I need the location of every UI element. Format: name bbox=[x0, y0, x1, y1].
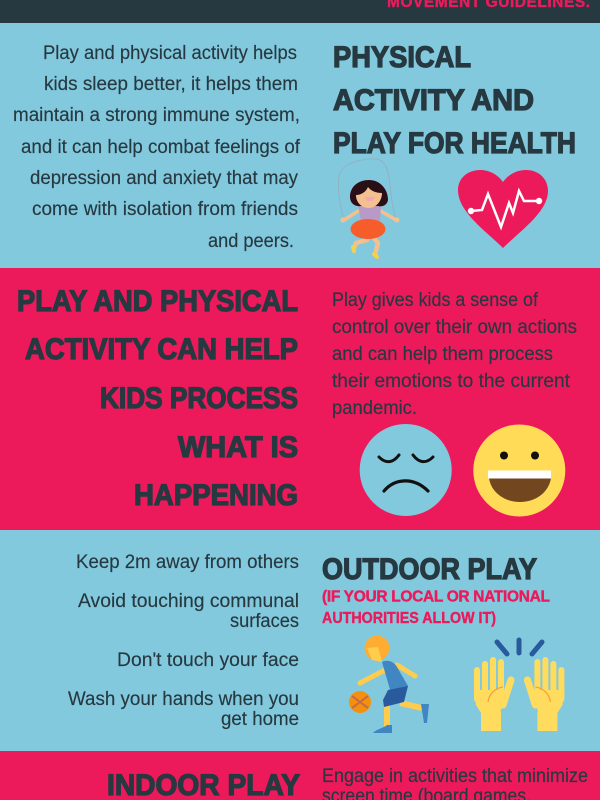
panel: indoor play bbox=[0, 751, 600, 800]
text block: health benefits: maintain a strong immune system, bbox=[13, 105, 300, 126]
text block: health benefits: kids sleep better, it helps them bbox=[44, 74, 298, 95]
text block: health benefits: depression and anxiety that may bbox=[30, 168, 298, 189]
text block: outdoor safety rules: Don't touch your face bbox=[117, 650, 299, 671]
text block: outdoor safety rules: Keep 2m away from others bbox=[76, 552, 299, 573]
text block: outdoor safety rules: surfaces bbox=[230, 611, 299, 632]
icon: child dribbling basketball bbox=[349, 636, 429, 733]
text block: health benefits: come with isolation from friends bbox=[32, 199, 298, 220]
icon: raised hands bbox=[474, 640, 564, 731]
heading: play and physical activity can help kids process: KIDS PROCESS bbox=[100, 382, 298, 415]
subheading: authorities note: (IF YOUR LOCAL OR NATIONAL bbox=[322, 588, 550, 606]
text block: indoor activities: Engage in activities that minimize bbox=[322, 766, 588, 787]
heading: outdoor play: OUTDOOR PLAY bbox=[322, 553, 537, 586]
text block: health benefits: and peers. bbox=[208, 231, 294, 252]
subheading: authorities note: AUTHORITIES ALLOW IT) bbox=[322, 610, 496, 627]
heading: physical activity and play for health bbox=[333, 41, 576, 160]
text block: sense of control: Play gives kids a sense of bbox=[332, 290, 539, 311]
heading: play and physical activity can help kids process: HAPPENING bbox=[134, 479, 298, 512]
left hand bbox=[474, 657, 511, 731]
panel: process what is happening bbox=[0, 268, 600, 530]
text block: sense of control: their emotions to the current bbox=[332, 371, 571, 392]
text block: outdoor safety rules bbox=[68, 552, 299, 730]
icon: girl skipping rope bbox=[338, 159, 400, 257]
text block: health benefits bbox=[13, 43, 301, 252]
text block: health benefits: and it can help combat feelings of bbox=[21, 137, 301, 158]
text block: outdoor safety rules: Wash your hands when you bbox=[68, 689, 299, 710]
panel: header band bbox=[0, 0, 600, 23]
text block: sense of control: pandemic. bbox=[332, 398, 417, 419]
panel: physical activity and play for health bbox=[0, 23, 600, 268]
panel: outdoor play bbox=[0, 530, 600, 751]
text block: outdoor safety rules: get home bbox=[221, 709, 299, 730]
icon: sad face bbox=[360, 424, 452, 516]
heading: physical activity and play for health: ACTIVITY AND bbox=[333, 84, 534, 117]
text block: sense of control bbox=[332, 290, 577, 419]
text block: outdoor safety rules: Avoid touching communal bbox=[78, 591, 299, 612]
text block: indoor activities bbox=[322, 766, 588, 800]
heading: play and physical activity can help kids process bbox=[17, 285, 298, 512]
icon: happy face bbox=[473, 424, 565, 516]
subheading: authorities note bbox=[322, 588, 550, 627]
text block: health benefits: Play and physical activity helps bbox=[43, 43, 297, 64]
text block: sense of control: control over their own actions bbox=[332, 317, 577, 338]
heading: play and physical activity can help kids process: ACTIVITY CAN HELP bbox=[25, 333, 298, 366]
text block: sense of control: and can help them process bbox=[332, 344, 553, 365]
right hand bbox=[527, 657, 564, 731]
heading: play and physical activity can help kids process: PLAY AND PHYSICAL bbox=[17, 285, 298, 318]
icon: heart with pulse line bbox=[458, 170, 548, 248]
heading: play and physical activity can help kids process: WHAT IS bbox=[178, 431, 298, 464]
heading: physical activity and play for health: PHYSICAL bbox=[333, 41, 471, 74]
